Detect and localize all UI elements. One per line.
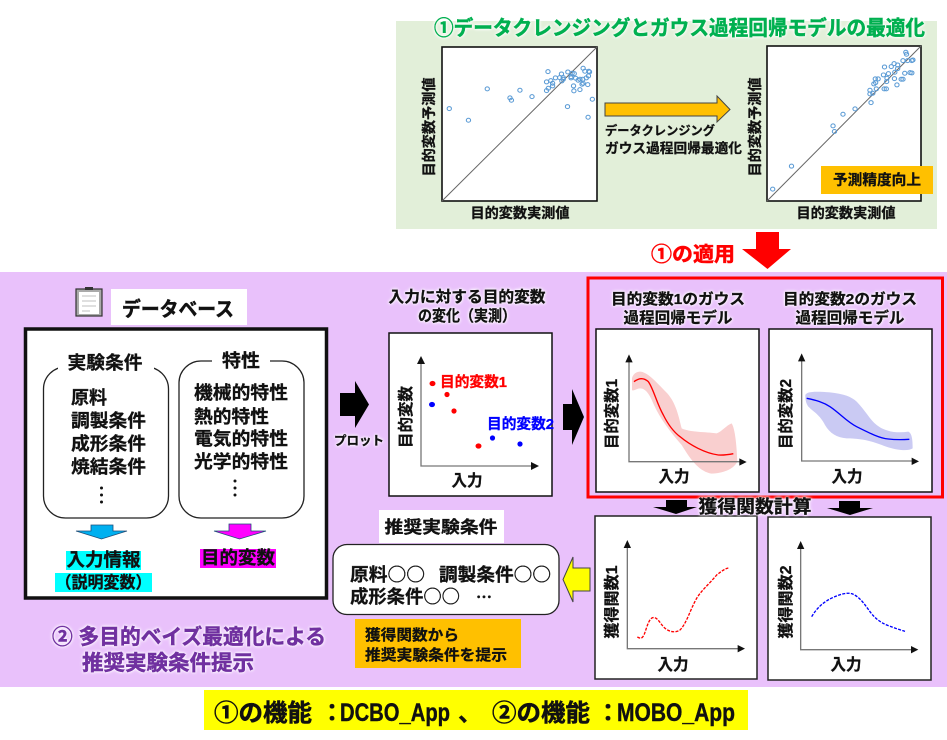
footer: app functions: [204, 690, 748, 730]
chart: measured scatter: 目的変数: [396, 386, 415, 448]
heading: GP model 1: 過程回帰モデル: [624, 308, 733, 327]
footer: app functions: MOBO_App: [617, 699, 735, 727]
group: experimental conditions: 原料: [71, 388, 107, 408]
panel: database: [26, 329, 326, 598]
chart: acquisition function 2: [768, 517, 931, 680]
chart: GP model 2: [769, 329, 932, 492]
label: objective variables: 目的変数: [201, 548, 275, 568]
arrow: yellow left: [563, 557, 590, 602]
axis label: measured value, left: 目的変数実測値: [470, 205, 570, 221]
panel: red frame GP models: [588, 278, 942, 497]
heading: data cleansing title: ①データクレンジングとガウス過程回帰モデルの最適化: [434, 16, 925, 40]
callout: suggest from acquisition function: 推奨実験条件を提示: [365, 646, 507, 664]
heading: database: [111, 289, 247, 325]
group: properties: 電気的特性: [194, 428, 288, 449]
chart: acquisition function 1: [595, 516, 757, 679]
group: properties: 機械的特性: [194, 383, 288, 403]
heading: multi-objective Bayesian optimization: 推奨実験条件提示: [82, 652, 254, 675]
heading: measured change: [388, 287, 546, 325]
label: application of step 1: ①の適用: [651, 243, 735, 266]
footer: app functions: ②の機能: [492, 700, 590, 727]
chart: acquisition function 2: 入力: [830, 656, 862, 674]
arrow: acquisition left down: [653, 500, 697, 514]
footer: app functions: DCBO_App: [340, 699, 450, 727]
heading: recommended conditions: [379, 510, 504, 543]
group: properties: 光学的特性: [194, 451, 288, 472]
chart: acquisition function 1: 入力: [658, 656, 688, 674]
chart: measured scatter: 入力: [452, 472, 482, 490]
chart: acquisition function 2: 獲得関数2: [776, 566, 795, 638]
chart: GP model 1: 目的変数1: [602, 379, 621, 449]
callout: improved prediction accuracy: 予測精度向上: [833, 171, 921, 189]
group: experimental conditions: 調製条件: [71, 411, 146, 431]
group: experimental conditions: 成形条件: [71, 433, 146, 454]
chart: measured scatter: [389, 333, 554, 496]
chart: scatter before cleansing: [442, 47, 597, 201]
axis label: predicted value, right: 目的変数予測値: [747, 78, 763, 176]
group: properties: 熱的特性: [194, 407, 269, 427]
text block: recommended conditions: 調製条件○○: [439, 561, 551, 587]
text block: recommended conditions: …: [476, 584, 492, 608]
footer: app functions: ：: [596, 693, 620, 728]
chart: GP model 1: [596, 329, 759, 492]
chart: GP model 2: 入力: [832, 468, 862, 486]
arrow: objective down: [214, 524, 266, 539]
chart: GP model 1: 入力: [658, 468, 690, 486]
chart: measured scatter: 目的変数2: [487, 415, 554, 433]
text: cleansing step: データクレンジング: [605, 123, 715, 138]
arrow: input down: [76, 525, 127, 539]
heading: GP model 2: [783, 290, 917, 327]
label: input information: 入力情報: [66, 550, 140, 570]
callout: suggest from acquisition function: [355, 619, 521, 668]
heading: measured change: 入力に対する目的変数: [388, 287, 546, 306]
chart: acquisition function 1: 獲得関数1: [602, 565, 621, 638]
arrow: to models: [563, 389, 584, 445]
label: explanatory variables: （説明変数）: [56, 573, 152, 592]
heading: GP model 1: [611, 290, 745, 327]
group: experimental conditions: 焼結条件: [71, 457, 146, 477]
heading: GP model 1: 目的変数1のガウス: [611, 290, 745, 308]
label: acquisition function calculation: 獲得関数計算: [698, 496, 812, 517]
footer: app functions: ：: [320, 693, 344, 728]
group: experimental conditions: [44, 353, 168, 518]
panel: data cleansing and GP optimization: [396, 16, 937, 229]
heading: GP model 2: 過程回帰モデル: [796, 308, 905, 327]
arrow: plot: [340, 381, 369, 428]
footer: app functions: 、: [458, 693, 482, 728]
arrow: red down: [742, 232, 791, 269]
axis label: measured value, right: 目的変数実測値: [796, 205, 896, 221]
text: GP optimization step: ガウス過程回帰最適化: [605, 140, 743, 156]
group: properties: [179, 350, 304, 518]
chart: measured scatter: 目的変数1: [440, 373, 507, 391]
text block: recommended conditions: 原料○○: [350, 561, 425, 587]
heading: multi-objective Bayesian optimization: ② 多目的ベイズ最適化による: [52, 625, 326, 649]
axis label: predicted value, left: 目的変数予測値: [421, 78, 437, 176]
icon: clipboard: [76, 287, 102, 316]
callout: improved prediction accuracy: [821, 166, 933, 194]
group: experimental conditions: 実験条件: [68, 353, 142, 373]
heading: multi-objective Bayesian optimization: [52, 625, 326, 675]
panel: multi-objective Bayesian optimization background: [0, 272, 947, 687]
heading: database: データベース: [122, 297, 234, 321]
heading: GP model 2: 目的変数2のガウス: [783, 290, 917, 308]
arrow: acquisition right down: [827, 501, 873, 515]
arrow: orange right: [605, 96, 730, 122]
chart: scatter after cleansing: [767, 46, 921, 201]
chart: GP model 2: 目的変数2: [776, 379, 795, 449]
callout: suggest from acquisition function: 獲得関数から: [365, 626, 459, 644]
heading: recommended conditions: 推奨実験条件: [384, 517, 498, 537]
heading: measured change: の変化（実測）: [418, 306, 516, 325]
group: properties: 特性: [222, 351, 260, 371]
text block: recommended conditions: [333, 544, 559, 614]
label: plot: プロット: [334, 434, 384, 448]
footer: app functions: ①の機能: [214, 700, 312, 727]
text block: recommended conditions: 成形条件○○: [350, 583, 460, 609]
